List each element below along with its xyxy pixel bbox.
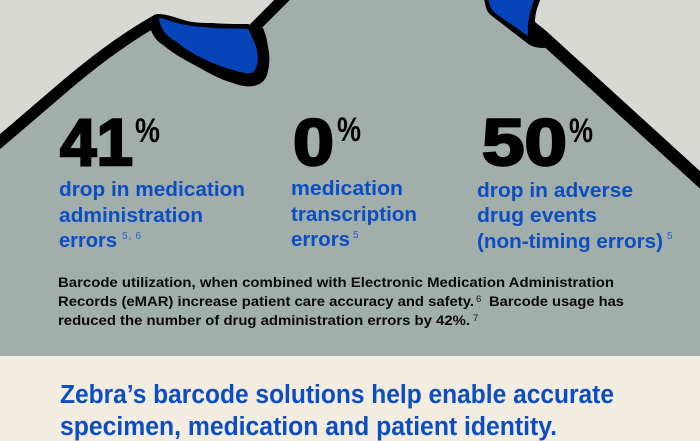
stat: 0%: [291, 105, 417, 251]
body paragraph: 7: [473, 313, 478, 324]
body paragraph: Barcode usage has: [489, 294, 624, 310]
icon: left blue cuff: [150, 14, 269, 86]
closing heading: [60, 381, 614, 441]
stat: 0%: %: [337, 111, 361, 149]
stat: 41%: 41: [60, 105, 133, 179]
stat: 50%: (non-timing errors): [477, 230, 663, 253]
stat: 50%: drop in adverse: [477, 179, 633, 202]
stat: 50%: 5: [667, 231, 673, 242]
closing heading: specimen, medication and patient identity.: [60, 413, 557, 441]
stat: 41%: administration: [59, 204, 203, 227]
body paragraph: [58, 275, 624, 329]
body paragraph: Barcode utilization, when combined with Electronic Medication Administration: [58, 275, 614, 291]
stat: 0%: 0: [293, 105, 334, 179]
body paragraph: reduced the number of drug administration errors by 42%.: [58, 313, 470, 329]
stat: 41%: %: [135, 112, 160, 150]
icon: right blue cuff: [483, 0, 549, 48]
body paragraph: Records (eMAR) increase patient care accuracy and safety.: [58, 294, 474, 310]
stat: 41%: 5, 6: [122, 231, 141, 242]
closing heading: Zebra’s barcode solutions help enable accurate: [60, 381, 614, 409]
stat: 0%: 5: [353, 230, 359, 241]
stat: 50%: drug events: [477, 204, 597, 227]
stat: 41%: drop in medication: [59, 178, 245, 201]
stat: 0%: transcription: [291, 203, 417, 226]
stat: 41%: errors: [59, 229, 117, 252]
stat: 0%: medication: [291, 177, 403, 200]
stat: 0%: errors: [291, 228, 350, 251]
body paragraph: 6: [476, 294, 481, 305]
stat: 41%: [59, 105, 245, 252]
stat: 50%: %: [569, 112, 593, 150]
stat: 50%: [477, 105, 673, 253]
stat: 50%: 50: [482, 105, 567, 179]
bottom band: [0, 356, 700, 441]
